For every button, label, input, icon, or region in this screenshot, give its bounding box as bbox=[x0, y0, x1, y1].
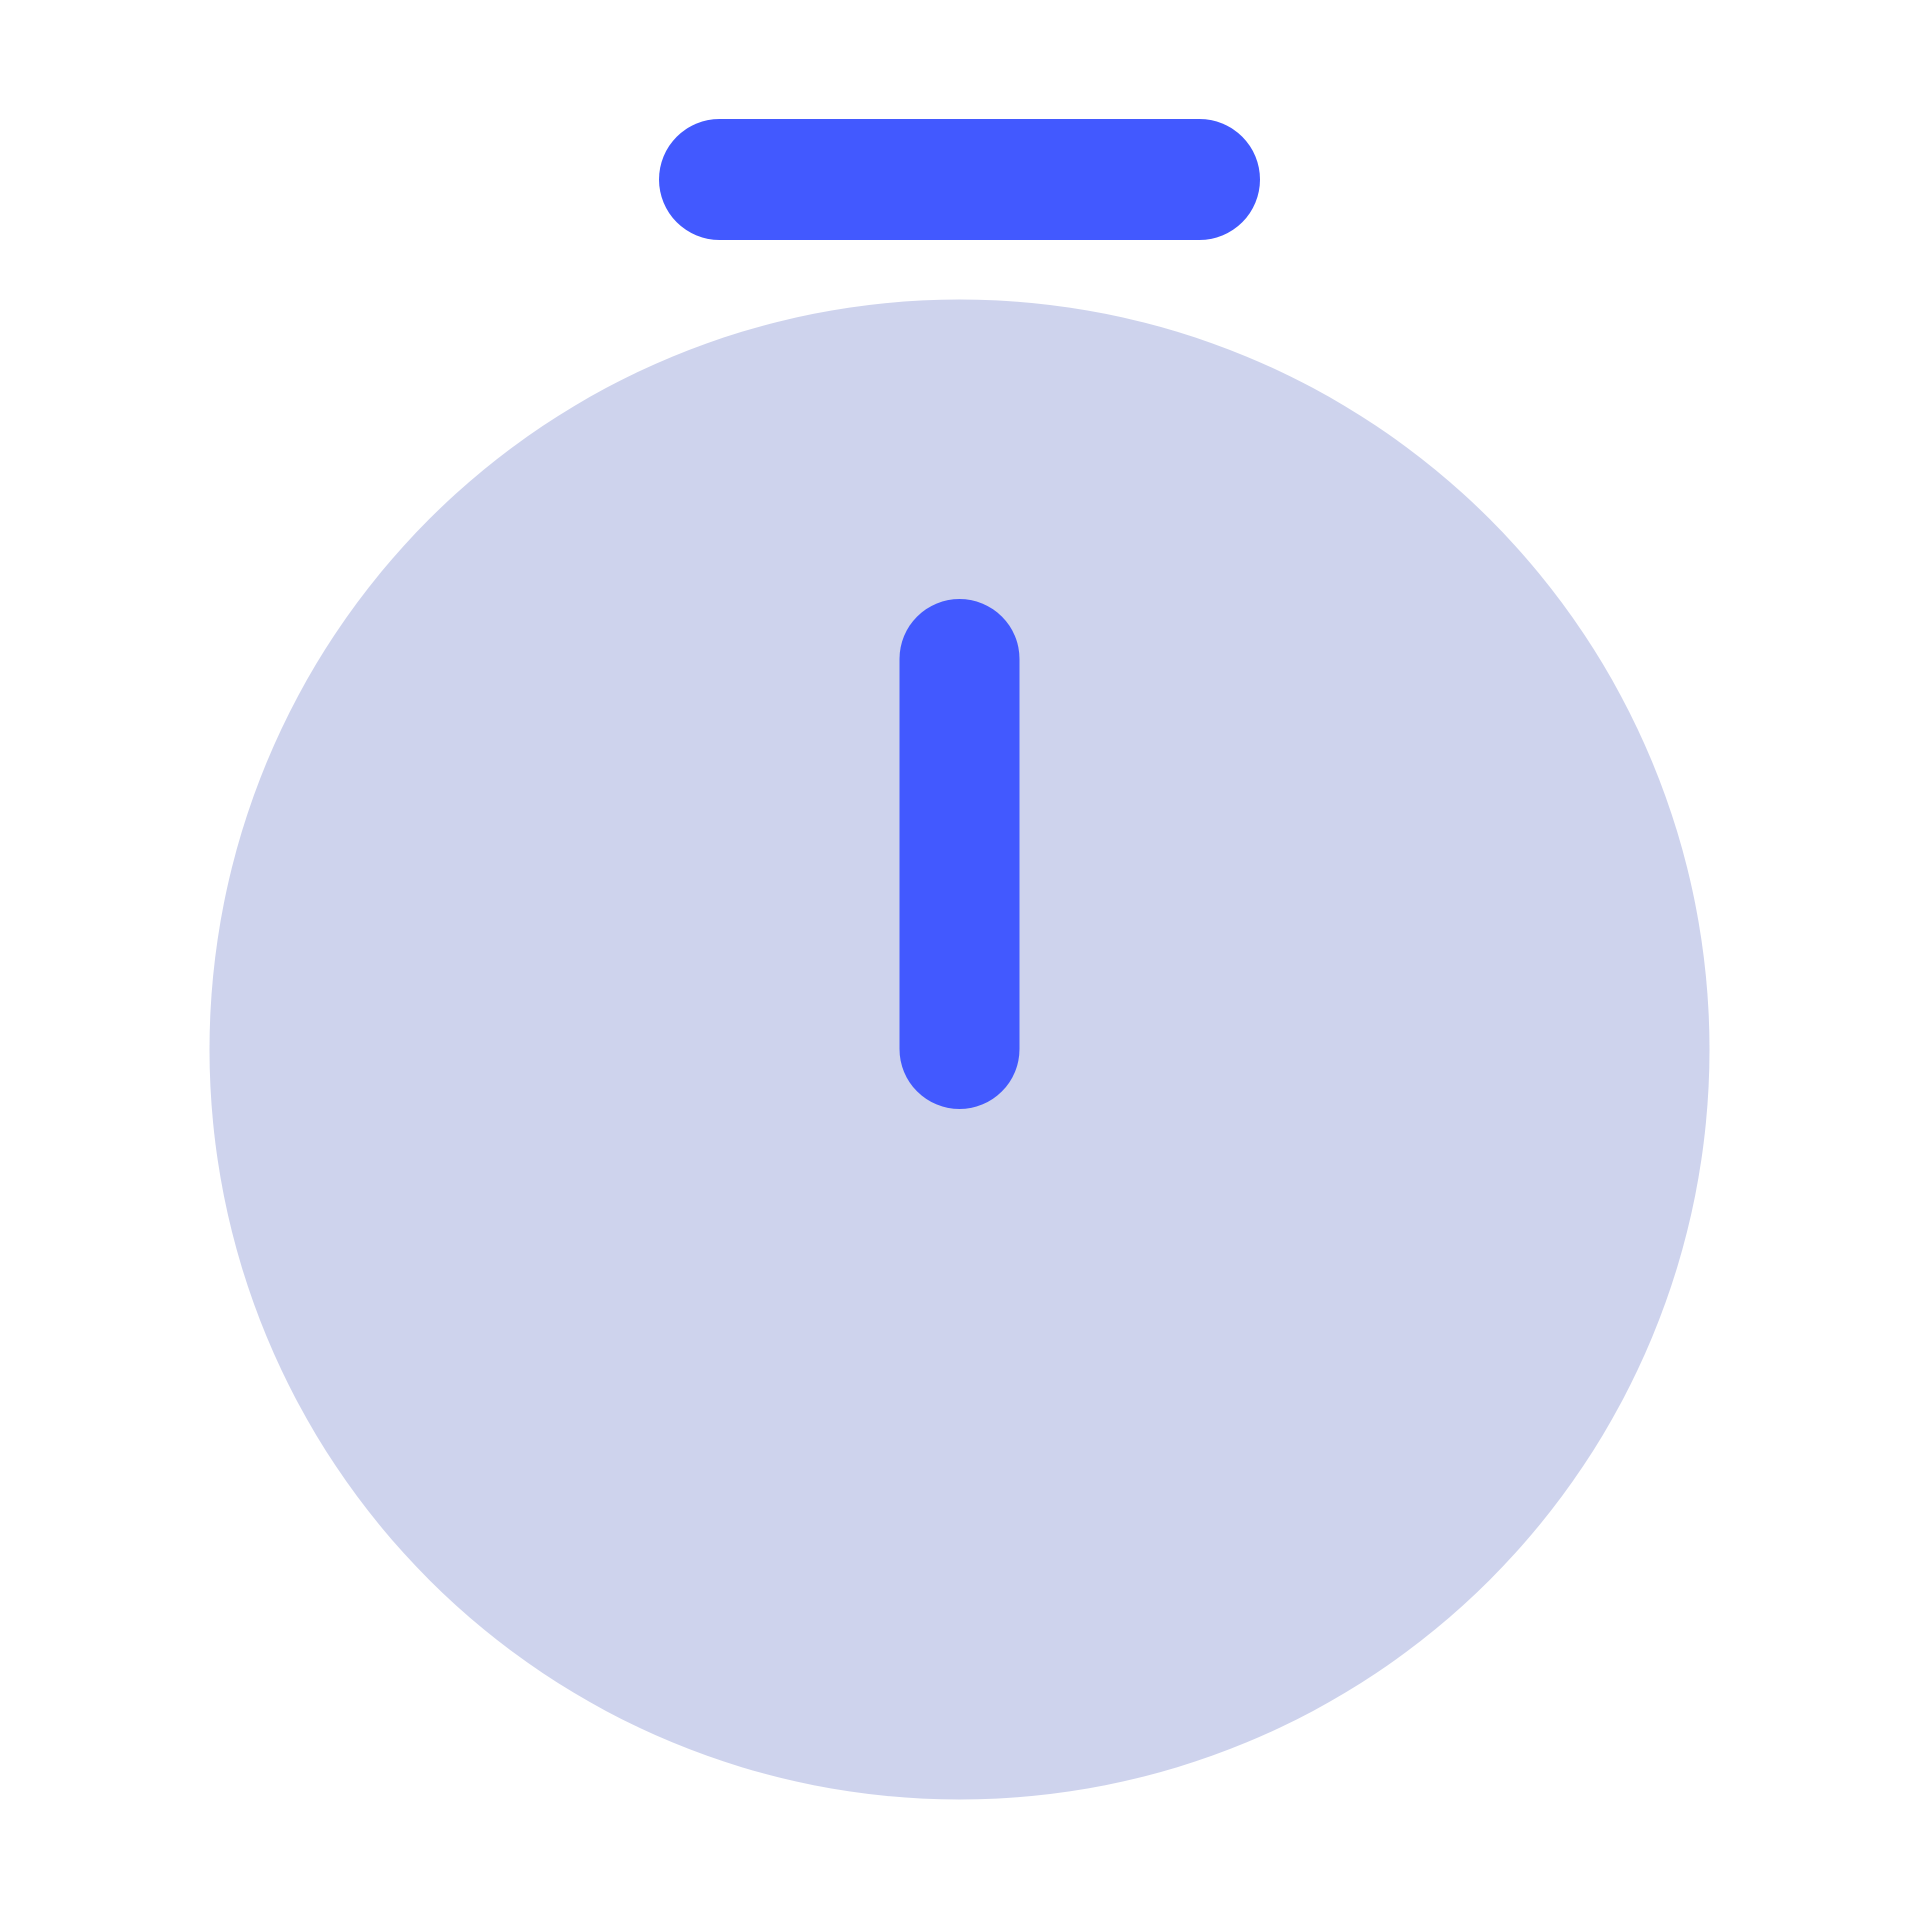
stopwatch dial circle bbox=[210, 300, 1710, 1800]
stopwatch hand bbox=[900, 599, 1020, 1109]
stopwatch top button bar bbox=[659, 119, 1260, 240]
